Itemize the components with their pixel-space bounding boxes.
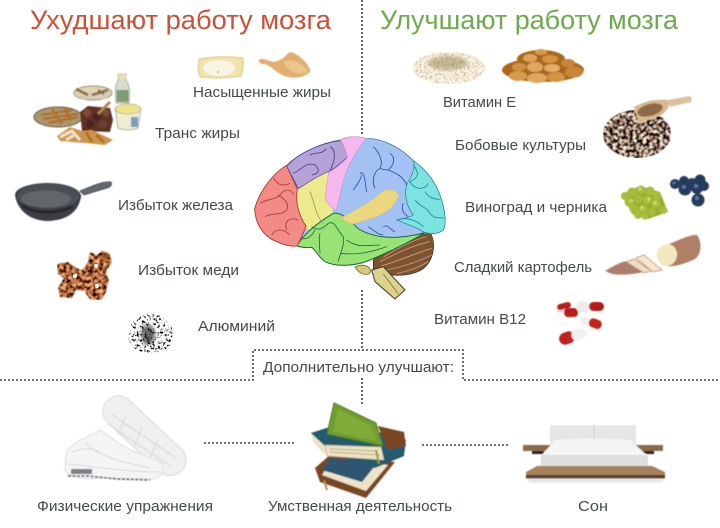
icon: stack of books — [311, 403, 406, 498]
label: saturated fats: Насыщенные жиры — [193, 84, 331, 101]
icon: white sneakers — [65, 390, 192, 482]
icon: capsule pills — [556, 301, 604, 346]
icon: copper nugget — [57, 250, 112, 300]
brainstem — [372, 267, 405, 299]
brain base silhouette — [255, 137, 445, 265]
icon: almonds — [502, 49, 584, 83]
icon: platform bed — [523, 425, 665, 482]
icon: seeds — [413, 52, 485, 84]
middle teal book — [311, 422, 406, 468]
title: worsen brain function: Ухудшают работу мозга — [30, 5, 332, 35]
region: red frontal — [255, 165, 306, 246]
region: purple — [287, 141, 347, 189]
icon: cheese — [198, 57, 243, 78]
label: trans fats: Транс жиры — [155, 125, 240, 142]
sulci lines — [260, 147, 444, 262]
icon: trans fats food — [34, 74, 141, 145]
brain illustration — [255, 137, 445, 299]
label: copper excess: Избыток меди — [138, 262, 239, 279]
label: vitamin E: Витамин Е — [443, 94, 516, 111]
region: yellow temporal stripe — [342, 190, 399, 224]
icon: chicken leg — [259, 52, 310, 78]
heading: additionally improve: Дополнительно улучшают: — [263, 359, 454, 376]
region: cyan — [397, 161, 445, 234]
label: sweet potato: Сладкий картофель — [454, 259, 592, 276]
region: yellow parietal — [294, 167, 337, 230]
region: pink — [325, 137, 366, 211]
cream pages book — [325, 445, 384, 460]
icon: sweet potato — [605, 235, 700, 275]
green top book — [327, 403, 383, 446]
label: vitamin B12: Витамин B12 — [434, 311, 526, 328]
icon: grapes and blueberries — [621, 174, 709, 220]
item: saturated fats — [198, 52, 310, 78]
icon: legumes with scoop — [603, 96, 692, 158]
icon: aluminium foil ball — [128, 313, 173, 354]
item: vitamin E foods — [413, 49, 584, 84]
region: green temporal — [297, 213, 425, 265]
lower book — [315, 455, 395, 498]
title: improve brain function: Улучшают работу мозга — [380, 5, 679, 35]
label: aluminium: Алюминий — [198, 318, 275, 335]
label: physical exercise: Физические упражнения — [37, 498, 213, 515]
label: grapes and blueberries: Виноград и черника — [465, 199, 608, 216]
label: mental activity: Умственная деятельность — [268, 498, 452, 515]
icon: cast iron pan — [15, 182, 112, 221]
label: iron excess: Избыток железа — [118, 197, 234, 214]
cerebellum — [373, 233, 434, 275]
label: sleep: Сон — [578, 498, 608, 515]
label: legumes: Бобовые культуры — [455, 137, 586, 154]
